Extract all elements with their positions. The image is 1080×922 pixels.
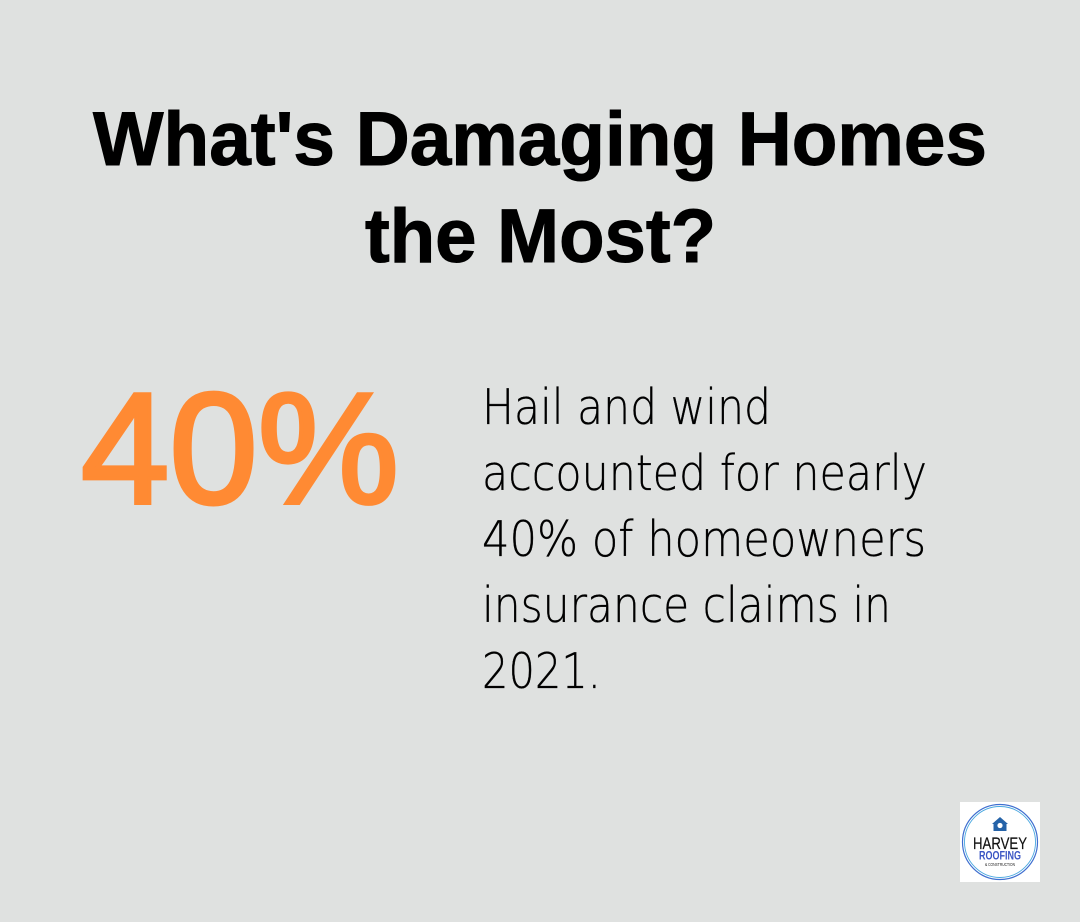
- description text: 40% of homeowners: [482, 511, 926, 568]
- title: [93, 97, 987, 279]
- description text: insurance claims in: [482, 577, 891, 634]
- logo wordmark: HARVEY: [973, 834, 1027, 853]
- description text: [482, 379, 927, 700]
- title: the Most?: [365, 194, 716, 279]
- logo wordmark: ROOFING: [979, 848, 1021, 862]
- icon: house with heart: [992, 817, 1008, 831]
- logo wordmark: & CONSTRUCTION: [985, 862, 1015, 867]
- description text: 2021.: [482, 643, 601, 700]
- description text: Hail and wind: [482, 379, 771, 436]
- logo: Harvey Roofing & Construction: [960, 802, 1040, 882]
- description text: accounted for nearly: [482, 445, 927, 502]
- title: What's Damaging Homes: [93, 97, 987, 182]
- logo wordmark: [973, 834, 1027, 867]
- big statistic: 40%: 40%: [81, 361, 399, 537]
